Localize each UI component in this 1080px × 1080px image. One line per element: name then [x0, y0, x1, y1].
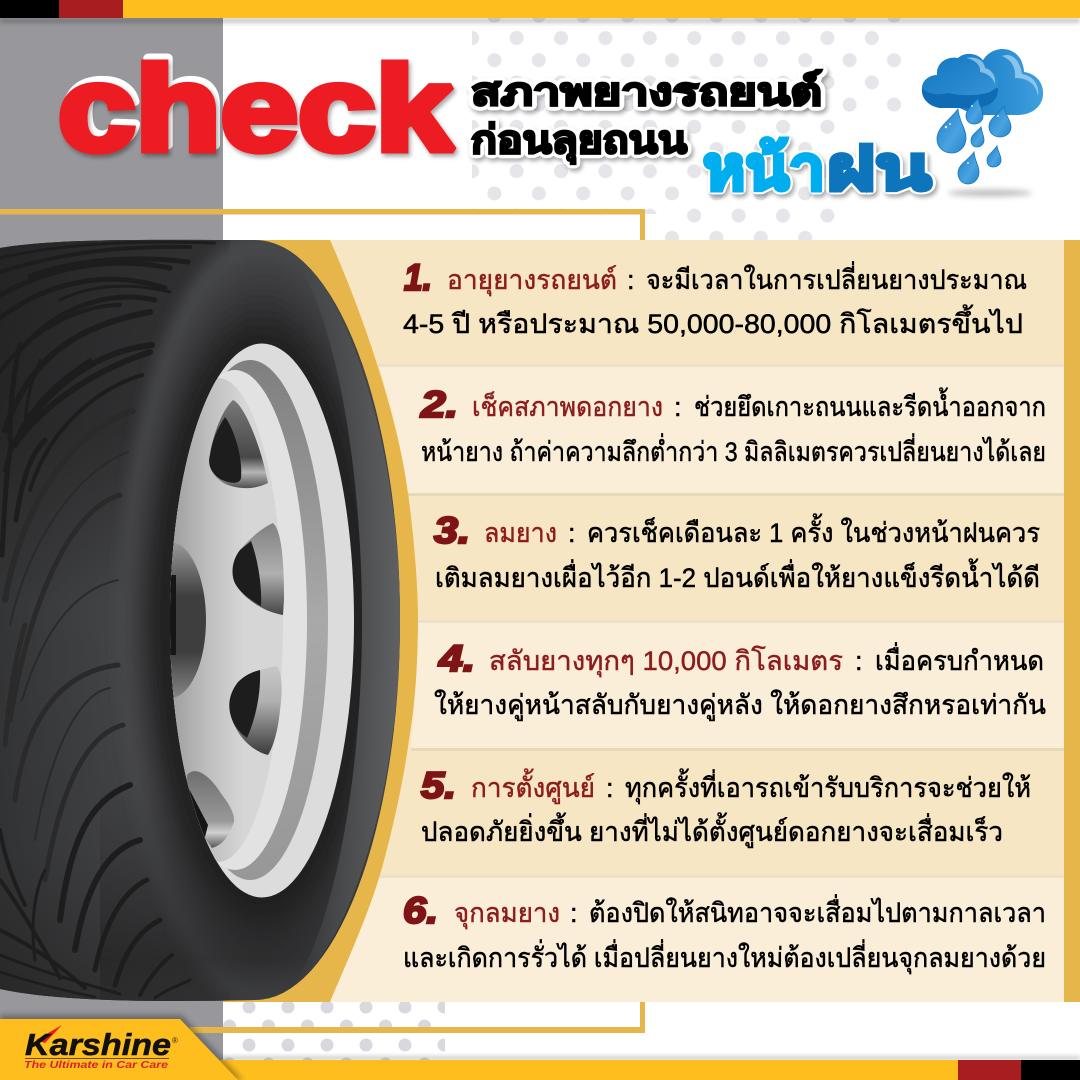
- wheel hub: [170, 542, 206, 698]
- title: check: check: [58, 42, 453, 176]
- step 1: tyre age: :: [627, 265, 635, 295]
- step 1: tyre age: 1.: [404, 257, 432, 298]
- title: rainy season: ฝน: [827, 135, 931, 202]
- step 1: tyre age: 4-5 ปี หรือประมาณ 50,000-80,000 กิโลเมตรขึ้นไป: [403, 304, 1023, 339]
- step 4: tyre rotation: [434, 638, 1046, 721]
- title: rainy season: หน้า: [703, 135, 825, 202]
- step 1: tyre age: จะมีเวลาในการเปลี่ยนยางประมาณ: [646, 261, 1027, 295]
- wheel rim: [170, 344, 354, 898]
- step 6: valve: 6.: [403, 890, 438, 931]
- step 4: tyre rotation: สลับยางทุกๆ 10,000 กิโลเมตร: [489, 646, 843, 678]
- logo: Karshine badge: [0, 1015, 243, 1080]
- step 3: tyre pressure: ควรเช็คเดือนละ 1 ครั้ง ในช่วงหน้าฝนควร: [587, 513, 1040, 548]
- step 3: tyre pressure: 3.: [434, 510, 470, 551]
- illustration: tyre and wheel: [0, 235, 420, 1005]
- step 6: valve: และเกิดการรั่วได้ เมื่อปลี่ยนยางใหม่ต้องเปลี่ยนจุกลมยางด้วย: [403, 939, 1046, 975]
- dot pattern: footer: [223, 1000, 445, 1060]
- title: check: check: [62, 37, 454, 171]
- step 3: tyre pressure: :: [568, 518, 576, 548]
- panel: cream rows: [330, 240, 1064, 1002]
- step 4: tyre rotation: เมื่อครบกำหนด: [875, 642, 1044, 676]
- step 2: tread condition: :: [674, 392, 682, 422]
- logo: Karshine badge: Karshine: [25, 1027, 171, 1062]
- wheel hole 2: [233, 523, 284, 615]
- title: rainy season: ฝน: [827, 135, 931, 202]
- tyre outer edge highlight: [308, 311, 400, 969]
- step 5: wheel alignment: [421, 765, 1031, 848]
- tyre body: [0, 235, 420, 1005]
- title: rainy season: หน้า: [703, 135, 825, 202]
- step 5: wheel alignment: ปลอดภัยยิ่งขึ้น ยางที่ไม่ได้ตั้งศูนย์ดอกยางจะเสื่อมเร็ว: [421, 812, 1003, 848]
- tread grooves: [0, 242, 215, 555]
- panel: right gold bar: [1064, 240, 1080, 1002]
- panel: gold backing: [223, 240, 1080, 1002]
- step 2: tread condition: เช็คสภาพดอกยาง: [472, 389, 663, 422]
- step 6: valve: [403, 890, 1046, 975]
- logo: Karshine badge: The Ultimate in Car Care: [24, 1060, 169, 1071]
- title: Thai subtitle lines: [471, 69, 822, 164]
- title: Thai subtitle lines: ก่อนลุยถนน: [471, 119, 687, 164]
- title: Thai subtitle lines: สภาพยางรถยนต์: [471, 69, 822, 114]
- title: Thai subtitle lines: ก่อนลุยถนน: [471, 119, 687, 164]
- title: rainy season: [703, 135, 931, 202]
- bottom colour bar: [0, 1056, 1080, 1080]
- step 1: tyre age: อายุยางรถยนต์: [447, 264, 617, 297]
- wheel hole 4: [186, 771, 234, 848]
- step 3: tyre pressure: ลมยาง: [484, 518, 557, 548]
- step 5: wheel alignment: ทุกครั้งที่เอารถเข้ารับบริการจะช่วยให้: [625, 768, 1031, 805]
- step 4: tyre rotation: :: [855, 646, 863, 676]
- step 5: wheel alignment: การตั้งศูนย์: [471, 768, 595, 804]
- step 5: wheel alignment: 5.: [421, 765, 456, 806]
- step 3: tyre pressure: เติมลมยางเผื่อไว้อีก 1-2 ปอนด์เพื่อให้ยางแข็งรีดน้ำได้ดี: [435, 558, 1040, 593]
- step 4: tyre rotation: 4.: [438, 638, 475, 679]
- step 3: tyre pressure: [434, 510, 1040, 593]
- title: Thai subtitle lines: สภาพยางรถยนต์: [471, 69, 822, 114]
- wheel hole 1: [209, 400, 268, 488]
- step 6: valve: ต้องปิดให้สนิทอาจจะเสื่อมไปตามกาลเวลา: [589, 894, 1046, 928]
- gold frame outline: [0, 209, 645, 1033]
- logo: Karshine badge: ®: [172, 1036, 178, 1045]
- step 2: tread condition: 2.: [420, 384, 458, 425]
- top colour bar: [0, 0, 1080, 23]
- step 2: tread condition: [420, 384, 1046, 467]
- step 6: valve: :: [570, 898, 578, 928]
- step 1: tyre age: [403, 257, 1027, 339]
- step 4: tyre rotation: ให้ยางคู่หน้าสลับกับยางคู่หลัง ให้ดอกยางสึกหรอเท่ากัน: [434, 689, 1046, 721]
- step 6: valve: จุกลมยาง: [454, 898, 560, 930]
- step 5: wheel alignment: :: [606, 773, 614, 803]
- dot pattern: header: [472, 18, 905, 240]
- wheel hole 3: [229, 666, 282, 755]
- icon: rain cloud with drops: [922, 49, 1043, 196]
- title: check: [59, 54, 460, 160]
